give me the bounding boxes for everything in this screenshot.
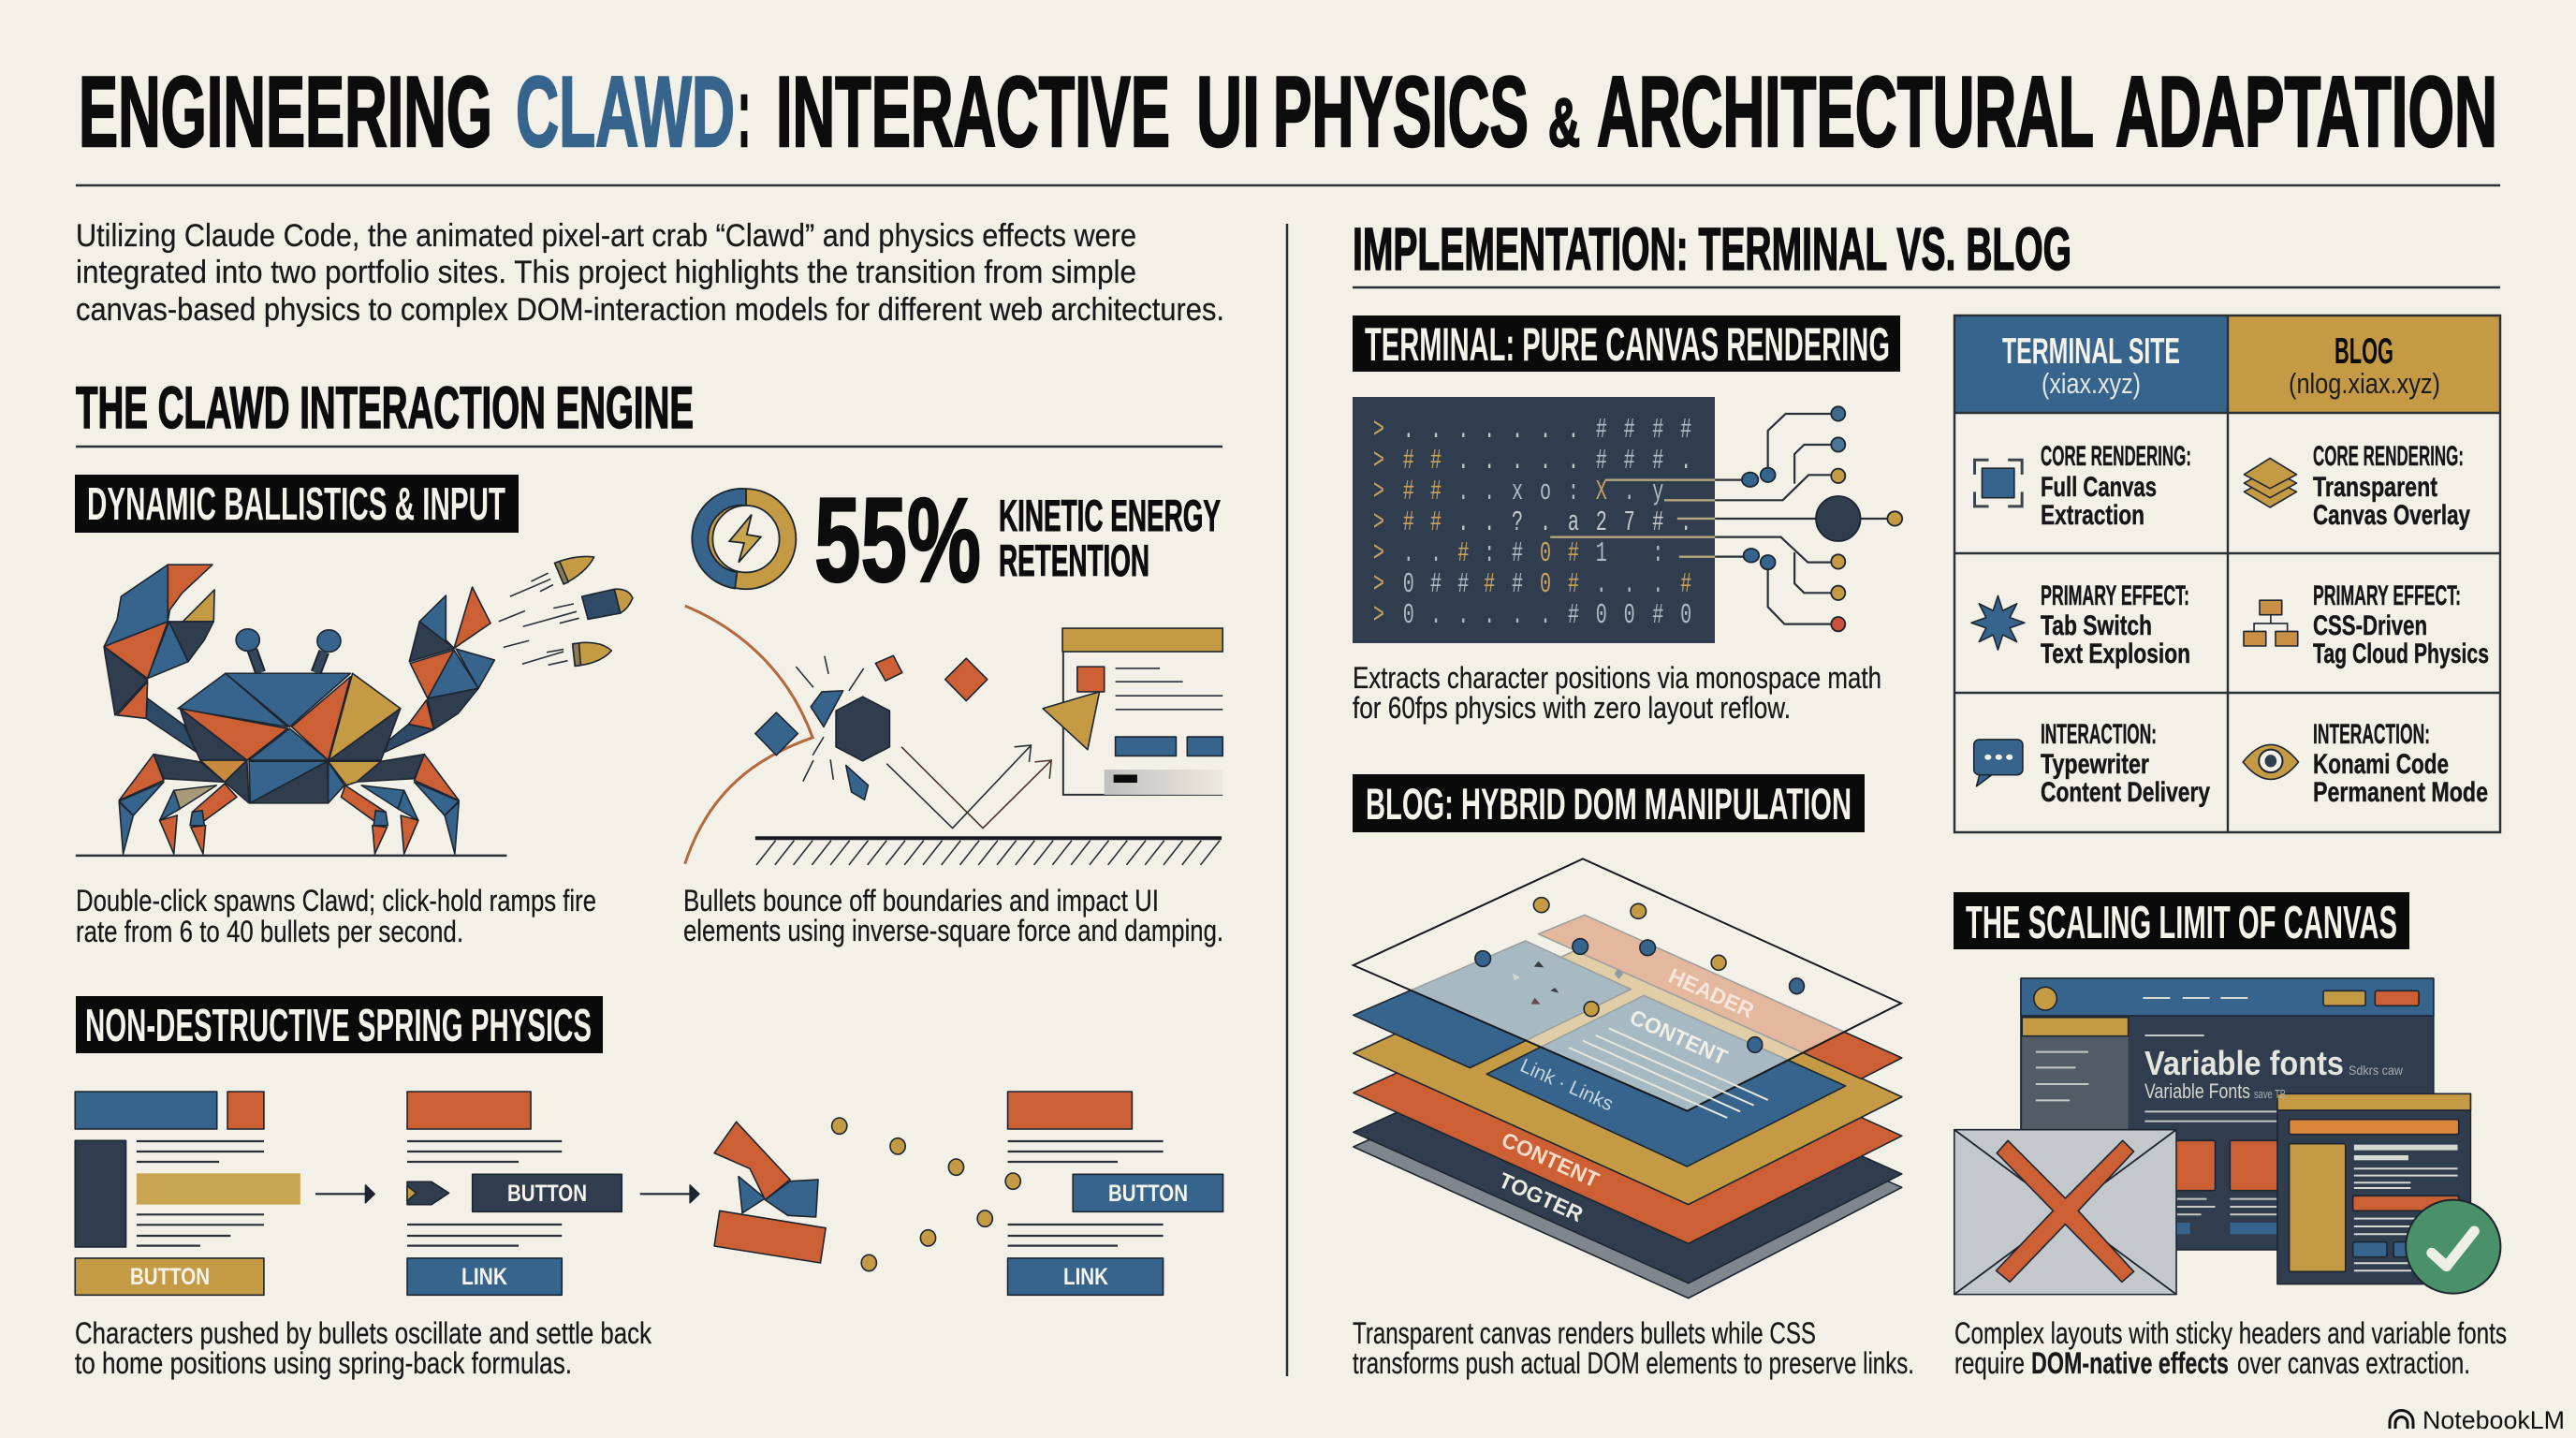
illustration: terminal character grid with extraction lines: >#0# bbox=[1373, 536, 1579, 569]
diagram: spring physics sequence bbox=[75, 1092, 1223, 1295]
intro text: canvas-based physics to complex DOM-interaction models for different web architectures. bbox=[76, 292, 1224, 328]
illustration: bullet impact and bounce bbox=[685, 606, 1222, 865]
stat: 55 percent kinetic energy retention: 55% bbox=[814, 474, 981, 608]
label: non-destructive spring physics: NON-DESTRUCTIVE SPRING PHYSICS bbox=[85, 1001, 592, 1051]
table header: terminal site: (xiax.xyz) bbox=[2042, 367, 2141, 400]
title: ENGINEERING bbox=[79, 55, 492, 168]
illustration: terminal character grid with extraction lines: > bbox=[1373, 598, 1384, 631]
caption: blog: Transparent canvas renders bullets while CSS bbox=[1353, 1316, 1816, 1350]
icon: kinetic energy ring bbox=[692, 489, 796, 589]
table header: blog: (nlog.xiax.xyz) bbox=[2289, 367, 2440, 400]
illustration: terminal character grid with extraction lines: >## bbox=[1373, 506, 1442, 538]
caption: terminal: for 60fps physics with zero layout reflow. bbox=[1353, 691, 1791, 725]
title: CLAWD bbox=[516, 55, 735, 168]
caption: spring back: to home positions using spring-back formulas. bbox=[75, 1346, 572, 1380]
stat: 55 percent kinetic energy retention: RETENTION bbox=[999, 536, 1149, 585]
logo: notebooklm: NotebookLM bbox=[2422, 1406, 2565, 1434]
intro text: Utilizing Claude Code, the animated pixel-art crab “Clawd” and physics effects were bbox=[76, 218, 1136, 254]
cell: blog core rendering: Canvas Overlay bbox=[2313, 500, 2470, 531]
title: : bbox=[738, 55, 751, 168]
title: INTERACTIVE bbox=[776, 55, 1170, 168]
heading: the clawd interaction engine: THE CLAWD INTERACTION ENGINE bbox=[76, 375, 694, 441]
illustration: terminal character grid with extraction lines: 0###... bbox=[1403, 567, 1663, 600]
illustration: canvas fail vs dom success windows: Sdkrs caw bbox=[2349, 1063, 2404, 1078]
illustration: terminal character grid with extraction lines: >## bbox=[1373, 444, 1442, 477]
comparison table: terminal site vs blog bbox=[1954, 315, 2500, 832]
illustration: canvas fail vs dom success windows: Variable fonts bbox=[2144, 1044, 2344, 1082]
label: blog hybrid dom manipulation bbox=[1353, 774, 1865, 832]
table header: terminal site bbox=[1954, 315, 2228, 413]
diagram: spring physics sequence: BUTTON bbox=[1108, 1181, 1188, 1207]
illustration: isometric dom layers: CONTENT bbox=[1498, 1127, 1603, 1192]
caption: blog bbox=[1353, 1316, 1914, 1380]
illustration: isometric dom layers: Link · Links bbox=[1517, 1055, 1617, 1115]
illustration: canvas fail vs dom success windows: save TB bbox=[2254, 1087, 2286, 1101]
caption: clawd spawn bbox=[76, 884, 596, 948]
caption: clawd spawn: Double-click spawns Clawd; click-hold ramps fire bbox=[76, 884, 596, 917]
illustration: terminal character grid with extraction lines: 0.....#00#0 bbox=[1403, 598, 1691, 631]
cell: terminal core rendering bbox=[2041, 441, 2191, 531]
caption: spring back bbox=[75, 1316, 652, 1380]
cell: terminal core rendering: Full Canvas bbox=[2041, 472, 2157, 503]
cell: blog primary effect: PRIMARY EFFECT: bbox=[2313, 580, 2461, 611]
title bbox=[79, 55, 2497, 168]
illustration: canvas fail vs dom success windows bbox=[1954, 978, 2500, 1295]
diagram: spring physics sequence: BUTTON bbox=[130, 1264, 210, 1290]
caption: bullets bounce bbox=[683, 884, 1223, 947]
cell: terminal primary effect: Tab Switch bbox=[2041, 610, 2152, 641]
illustration: terminal character grid with extraction lines: > bbox=[1373, 413, 1384, 446]
intro text bbox=[76, 218, 1224, 328]
illustration: terminal character grid with extraction lines: >##X bbox=[1373, 475, 1607, 507]
illustration: isometric dom layers: TOGTER bbox=[1495, 1167, 1587, 1226]
label: the scaling limit of canvas bbox=[1954, 892, 2409, 949]
cell: terminal interaction: Typewriter bbox=[2041, 749, 2149, 780]
diagram: spring physics sequence: LINK bbox=[1063, 1264, 1108, 1290]
illustration: terminal character grid with extraction lines: ....... bbox=[1403, 413, 1579, 446]
title: UI bbox=[1196, 55, 1260, 168]
cell: blog interaction: Konami Code bbox=[2313, 749, 2449, 780]
stat: 55 percent kinetic energy retention bbox=[814, 474, 1221, 608]
label: blog hybrid dom manipulation: BLOG: HYBRID DOM MANIPULATION bbox=[1366, 779, 1852, 829]
illustration: terminal character grid with extraction lines bbox=[1353, 397, 1902, 643]
illustration: terminal character grid with extraction lines: ### bbox=[1596, 444, 1663, 477]
diagram: spring physics sequence: BUTTON bbox=[507, 1181, 587, 1207]
illustration: terminal character grid with extraction lines: ..:#1: bbox=[1403, 536, 1663, 569]
cell: terminal primary effect: PRIMARY EFFECT: bbox=[2041, 580, 2189, 611]
table header: blog bbox=[2228, 315, 2500, 413]
table header: blog: BLOG bbox=[2334, 331, 2393, 372]
cell: terminal interaction: INTERACTION: bbox=[2041, 719, 2157, 750]
cell: terminal interaction: Content Delivery bbox=[2041, 777, 2210, 808]
illustration: canvas fail vs dom success windows: Variable Fonts bbox=[2144, 1079, 2250, 1103]
caption: terminal: Extracts character positions via monospace math bbox=[1353, 661, 1881, 695]
illustration: terminal character grid with extraction lines: ...... bbox=[1457, 444, 1691, 477]
label: dynamic ballistics bbox=[75, 475, 519, 533]
illustration: isometric dom layers bbox=[1354, 858, 1902, 1299]
heading: implementation terminal vs blog: IMPLEMENTATION: TERMINAL VS. BLOG bbox=[1353, 215, 2071, 283]
diagram: spring physics sequence: LINK bbox=[461, 1264, 507, 1290]
cell: blog primary effect: Tag Cloud Physics bbox=[2313, 638, 2489, 669]
cell: blog primary effect: CSS-Driven bbox=[2313, 610, 2427, 641]
illustration: isometric dom layers: HEADER bbox=[1665, 963, 1758, 1023]
cell: blog core rendering bbox=[2313, 441, 2470, 531]
caption: scaling: DOM-native effects bbox=[2031, 1346, 2229, 1380]
caption: bullets bounce: elements using inverse-square force and damping. bbox=[683, 914, 1223, 947]
label: non-destructive spring physics bbox=[76, 996, 603, 1053]
title: PHYSICS bbox=[1273, 55, 1529, 168]
cell: terminal primary effect: Text Explosion bbox=[2041, 638, 2190, 669]
cell: blog core rendering: Transparent bbox=[2313, 472, 2437, 503]
title: ARCHITECTURAL bbox=[1597, 55, 2094, 168]
caption: blog: transforms push actual DOM elements to preserve links. bbox=[1353, 1346, 1914, 1380]
illustration: terminal character grid with extraction lines: >#0## bbox=[1373, 567, 1691, 600]
caption: terminal bbox=[1353, 661, 1881, 725]
label: terminal pure canvas rendering: TERMINAL: PURE CANVAS RENDERING bbox=[1365, 318, 1890, 371]
stat: 55 percent kinetic energy retention: KINETIC ENERGY bbox=[999, 491, 1221, 540]
caption: scaling: require bbox=[1954, 1346, 2025, 1380]
cell: terminal interaction bbox=[2041, 719, 2210, 808]
table icons bbox=[1971, 458, 2299, 786]
label: dynamic ballistics: DYNAMIC BALLISTICS & INPUT bbox=[87, 479, 505, 530]
cell: terminal core rendering: Extraction bbox=[2041, 500, 2144, 531]
intro text: integrated into two portfolio sites. This project highlights the transition from simple bbox=[76, 255, 1136, 290]
cell: terminal primary effect bbox=[2041, 580, 2190, 669]
caption: spring back: Characters pushed by bullets oscillate and settle back bbox=[75, 1316, 652, 1350]
table header: terminal site: TERMINAL SITE bbox=[2002, 331, 2180, 372]
illustration: terminal character grid with extraction lines: #### bbox=[1596, 413, 1691, 446]
cell: blog interaction bbox=[2313, 719, 2488, 808]
caption: bullets bounce: Bullets bounce off boundaries and impact UI bbox=[683, 884, 1159, 917]
cell: blog interaction: Permanent Mode bbox=[2313, 777, 2488, 808]
illustration: terminal character grid with extraction lines: ..xo:.y bbox=[1457, 475, 1663, 507]
illustration: isometric dom layers: CONTENT bbox=[1626, 1005, 1731, 1069]
caption: clawd spawn: rate from 6 to 40 bullets per second. bbox=[76, 915, 463, 948]
cell: blog core rendering: CORE RENDERING: bbox=[2313, 441, 2464, 472]
illustration: terminal character grid with extraction lines: ..?.a27#. bbox=[1457, 506, 1691, 538]
cell: blog interaction: INTERACTION: bbox=[2313, 719, 2430, 750]
cell: terminal core rendering: CORE RENDERING: bbox=[2041, 441, 2191, 472]
label: terminal pure canvas rendering bbox=[1353, 315, 1900, 372]
cell: blog primary effect bbox=[2313, 580, 2489, 669]
title: & bbox=[1548, 86, 1580, 161]
illustration: polygon crab with bullets bbox=[76, 556, 633, 856]
caption: scaling: over canvas extraction. bbox=[2237, 1346, 2470, 1380]
caption: scaling bbox=[1954, 1316, 2507, 1380]
